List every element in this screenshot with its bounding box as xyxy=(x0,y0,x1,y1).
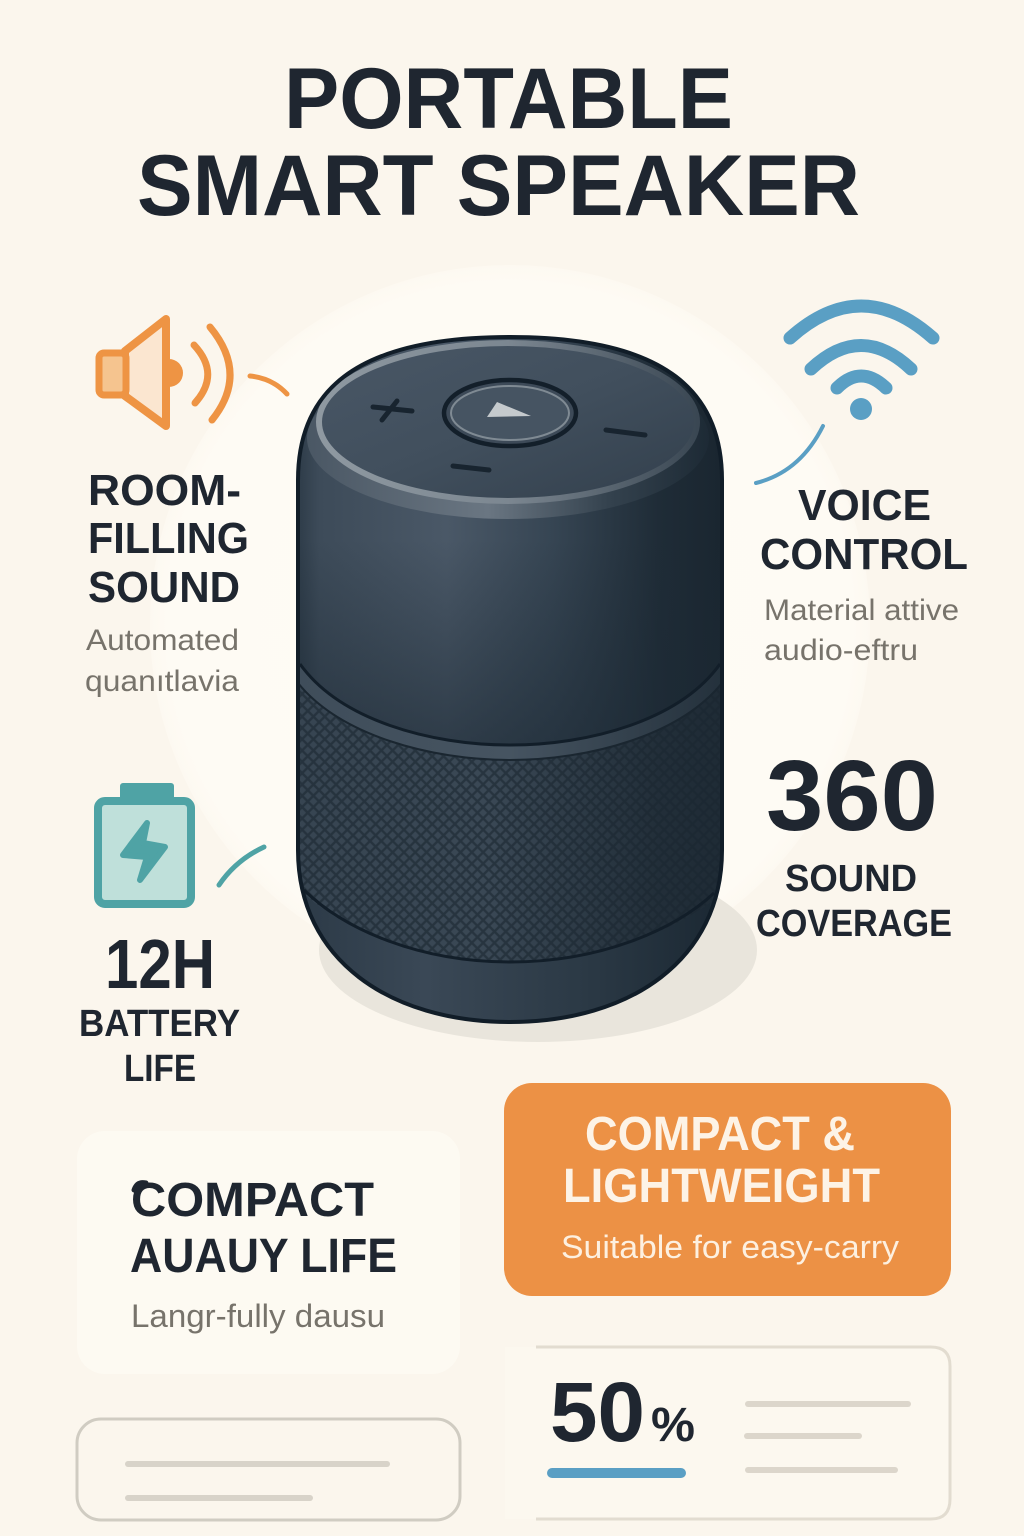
icon: battery xyxy=(98,783,191,904)
stat: 360 sound coverage: COVERAGE xyxy=(756,903,952,945)
panel: compact and lightweight: Suitable for easy-carry xyxy=(561,1229,899,1265)
seam band xyxy=(298,664,722,760)
speaker outline xyxy=(298,337,722,1022)
icon: wifi xyxy=(790,306,933,420)
text block: room-filling sound: SOUND xyxy=(88,563,240,612)
text block: room-filling sound: Automated xyxy=(86,624,239,657)
panel: 50 percent stat xyxy=(505,1347,950,1519)
upper body shading xyxy=(301,595,614,744)
top face xyxy=(319,343,697,501)
speaker body xyxy=(298,337,722,1022)
panel: compact auauy life: Langr-fully dausu xyxy=(131,1298,385,1334)
top bevel xyxy=(307,357,709,519)
text block: voice control: Material attive xyxy=(764,594,959,627)
panel: 50 percent stat: 50 xyxy=(550,1365,645,1459)
stat: 12H battery life xyxy=(79,925,240,1090)
title: PORTABLE xyxy=(284,51,733,147)
speaker shadow xyxy=(319,858,757,1042)
text block: voice control: VOICE xyxy=(798,481,931,530)
icon: speaker sound xyxy=(99,319,230,426)
play button xyxy=(444,380,576,446)
arc: wifi connector xyxy=(756,426,823,483)
plus control xyxy=(373,401,412,420)
stat: 12H battery life: LIFE xyxy=(124,1048,196,1090)
panel: compact and lightweight: COMPACT & xyxy=(585,1108,855,1161)
text block: voice control xyxy=(760,481,968,667)
panel: outlined placeholder xyxy=(77,1419,460,1520)
panel: compact auauy life: AUAUY LIFE xyxy=(130,1230,397,1283)
panel: compact auauy life: COMPACT xyxy=(131,1174,374,1227)
arc: battery connector xyxy=(219,847,264,885)
text block: voice control: audio-eftru xyxy=(764,634,918,667)
title: SMART SPEAKER xyxy=(137,138,860,234)
title xyxy=(137,51,860,234)
minus control right xyxy=(606,430,645,435)
stat: 360 sound coverage xyxy=(756,740,952,945)
speaker base xyxy=(308,898,567,1020)
arc: sound connector xyxy=(250,376,287,394)
stat: 12H battery life: BATTERY xyxy=(79,1003,240,1045)
text block: room-filling sound xyxy=(85,466,249,698)
panel: 50 percent stat: % xyxy=(651,1399,695,1452)
speaker illustration xyxy=(298,337,722,1030)
panel: compact and lightweight xyxy=(504,1083,951,1296)
stat: 360 sound coverage: 360 xyxy=(766,740,938,852)
text block: room-filling sound: quanıtlavia xyxy=(85,665,239,698)
text block: voice control: CONTROL xyxy=(760,530,968,579)
text block: room-filling sound: ROOM- xyxy=(88,466,241,515)
panel: compact and lightweight: LIGHTWEIGHT xyxy=(563,1160,880,1213)
panel: compact auauy life xyxy=(77,1131,460,1374)
background glow circle xyxy=(150,265,870,985)
minus control bottom xyxy=(453,466,489,470)
text block: room-filling sound: FILLING xyxy=(88,514,249,563)
stat: 360 sound coverage: SOUND xyxy=(785,858,917,900)
stat: 12H battery life: 12H xyxy=(105,925,215,1003)
speaker mesh grille xyxy=(300,690,634,960)
